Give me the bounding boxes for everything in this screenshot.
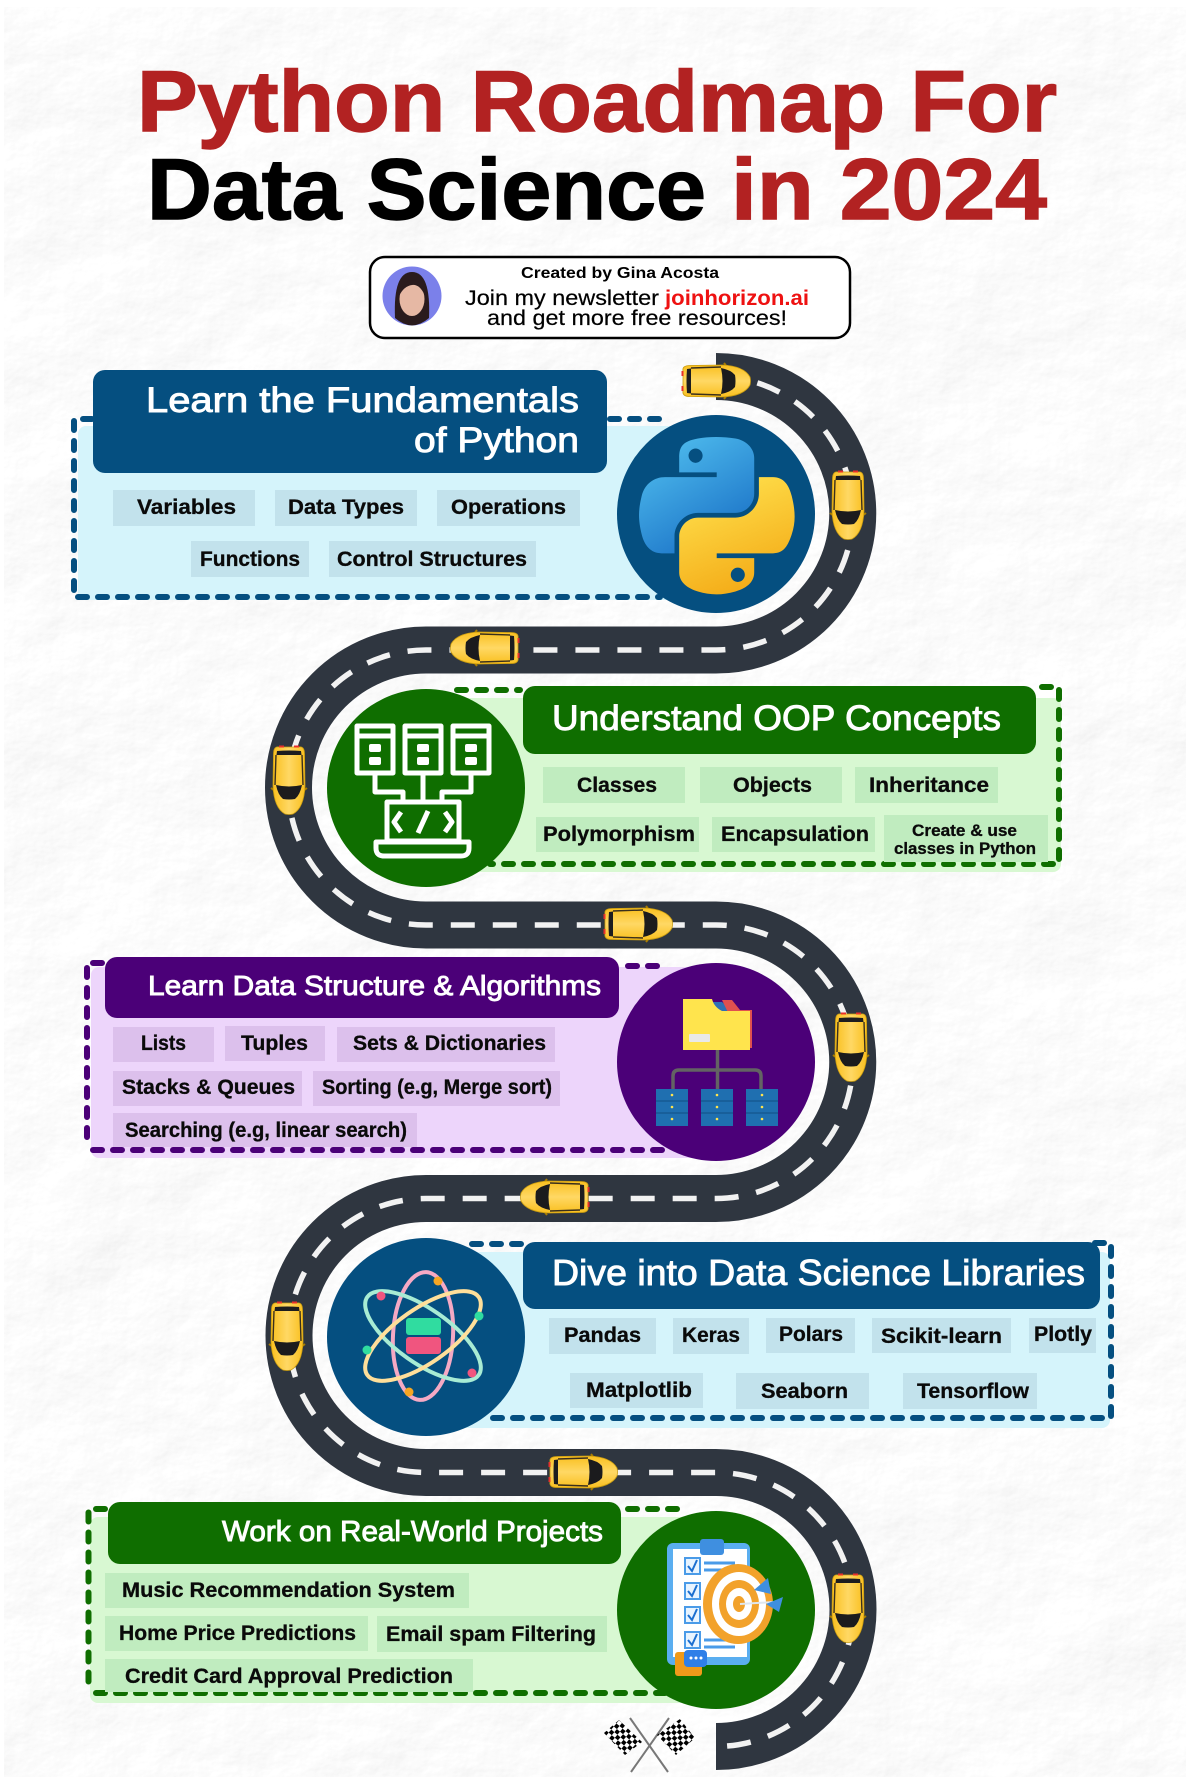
title (137, 54, 1057, 238)
icon: python logo (617, 415, 815, 613)
title: Data Science (147, 142, 706, 238)
topic chips (113, 1026, 560, 1147)
icon: checkered finish flags (604, 1718, 695, 1772)
callout text (465, 265, 809, 330)
topic chips: Searching (e.g, linear search) (125, 1119, 407, 1142)
callout text: joinhorizon.ai (664, 287, 809, 310)
topic chips (549, 1318, 1096, 1409)
callout text: and get more free resources! (487, 307, 787, 330)
panel: fundamentals of Python (74, 370, 815, 613)
topic chips: Matplotlib (586, 1379, 692, 1402)
heading: fundamentals: Learn the Fundamentals (146, 381, 579, 420)
callout text: Join my newsletter (465, 287, 659, 310)
topic chips: Data Types (288, 496, 404, 519)
heading: data structures: Learn Data Structure & Algorithms (148, 970, 601, 1001)
icon: servers and laptop code (327, 689, 525, 887)
topic chips: Control Structures (337, 548, 527, 571)
topic chips: Pandas (564, 1324, 641, 1347)
topic chips: Plotly (1034, 1323, 1092, 1346)
heading: data structures (105, 957, 619, 1018)
topic chips: Tuples (241, 1032, 308, 1055)
heading: OOP (523, 686, 1036, 754)
panel: real-world projects (88, 1502, 815, 1709)
avatar portrait (382, 266, 442, 326)
topic chips: Objects (733, 774, 812, 797)
heading: OOP: Understand OOP Concepts (552, 699, 1001, 738)
icon: checklist and target (617, 1511, 815, 1709)
project chips: Music Recommendation System (122, 1579, 455, 1602)
heading: libraries (523, 1242, 1100, 1309)
newsletter callout (370, 257, 850, 338)
heading: projects (108, 1502, 621, 1564)
topic chips: Sets & Dictionaries (353, 1032, 546, 1055)
topic chips: Keras (682, 1324, 740, 1347)
title: in 2024 (731, 142, 1047, 238)
topic chips: Stacks & Queues (122, 1076, 295, 1099)
topic chips: Variables (137, 496, 236, 519)
icon: folder hierarchy (617, 963, 815, 1161)
panel: OOP concepts (327, 686, 1061, 887)
title: Python Roadmap For (137, 54, 1057, 150)
callout text: Created by Gina Acosta (521, 265, 719, 282)
topic chips: classes in Python (894, 840, 1036, 858)
topic chips: Scikit-learn (881, 1325, 1002, 1348)
topic chips: Inheritance (869, 774, 989, 797)
topic chips: Seaborn (761, 1380, 848, 1403)
heading: fundamentals: of Python (414, 421, 579, 460)
heading: projects: Work on Real-World Projects (222, 1516, 603, 1548)
project chips: Email spam Filtering (386, 1623, 596, 1646)
topic chips: Lists (141, 1032, 186, 1055)
icon: atom (327, 1238, 525, 1436)
panel: data structures and algorithms (87, 957, 815, 1161)
topic chips (113, 490, 580, 577)
panel: data science libraries (327, 1238, 1111, 1436)
road (288, 376, 853, 1746)
project chips: Home Price Predictions (119, 1622, 356, 1645)
topic chips: Polymorphism (543, 823, 695, 846)
heading: libraries: Dive into Data Science Libraries (552, 1252, 1085, 1293)
topic chips: Tensorflow (917, 1380, 1030, 1403)
topic chips: Encapsulation (721, 823, 869, 846)
topic chips: Operations (451, 496, 566, 519)
topic chips (536, 767, 1048, 862)
project chips: Credit Card Approval Prediction (125, 1665, 453, 1688)
topic chips: Functions (200, 548, 300, 571)
topic chips: Sorting (e.g, Merge sort) (322, 1076, 552, 1099)
project chips (105, 1573, 607, 1692)
topic chips: Classes (577, 774, 657, 797)
topic chips: Polars (779, 1323, 843, 1346)
yellow cars on the road (269, 363, 869, 1642)
topic chips: Create & use (912, 822, 1017, 840)
heading: fundamentals (93, 370, 607, 473)
